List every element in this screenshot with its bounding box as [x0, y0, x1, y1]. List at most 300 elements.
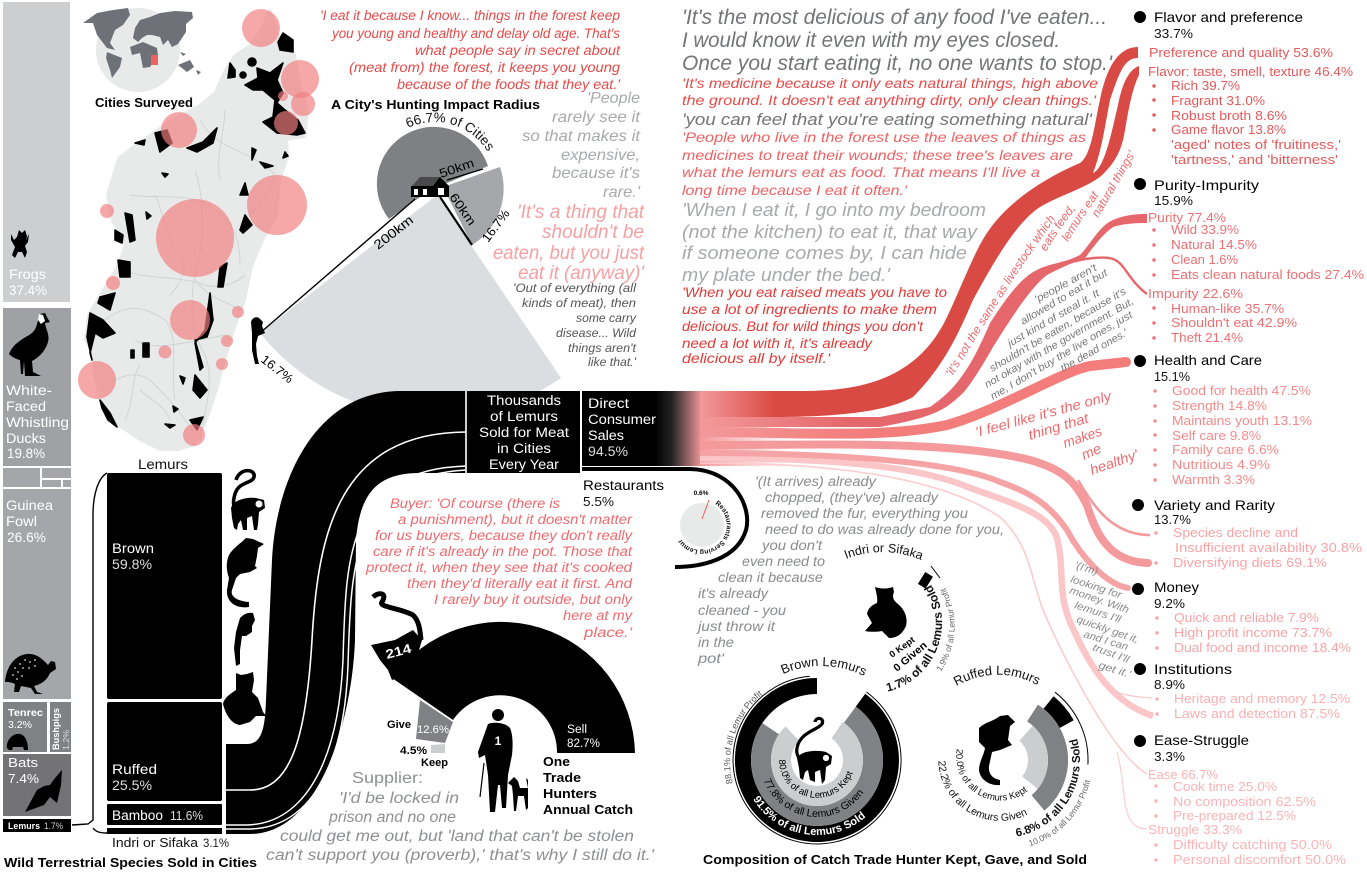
quote: it arrives already chopped: just throw it: [696, 619, 776, 634]
map landmass: [85, 10, 308, 450]
label: restaurants: Restaurants: [583, 478, 664, 493]
section: ease-struggle: [1134, 732, 1346, 867]
labels: Annual Catch: [543, 802, 633, 817]
ring: given: [751, 707, 883, 826]
flow label: not the same as livestock: 'it's not the same as livestock which: [946, 216, 1055, 375]
quote: eat it in my bedroom: my plate under the bed.': [682, 264, 892, 285]
heading: lemurs: Lemurs: [138, 457, 188, 472]
flow bands: lemur species to total sold: [226, 391, 467, 834]
ring: sold: [1044, 696, 1074, 728]
quote: raised meats: need a lot with it, it's already: [682, 336, 873, 351]
labels: [387, 719, 633, 817]
quote: most delicious: Once you start eating it, no one wants to stop.': [682, 52, 1113, 75]
quote: a thing that shouldn't be eaten: shouldn't be: [542, 222, 644, 243]
bar: indri or sifaka: Indri or Sifaka: [112, 836, 198, 850]
icon: lemur with 214: [371, 594, 422, 680]
section: purity-impurity: Purity 77.4%: [1148, 211, 1226, 225]
treemap cell: bats: [3, 754, 71, 816]
label: restaurants: 5.5%: [583, 494, 614, 509]
treemap cell: lemurs: [3, 819, 71, 832]
chart labels: 91.5% of all Lemurs Sold: [754, 796, 866, 836]
treemap cell: bushpigs: Bushpigs: [51, 708, 62, 750]
quote: people rarely see it: so that makes it: [522, 128, 641, 145]
labels: One: [543, 754, 570, 769]
sector: 50km radius: [377, 127, 488, 219]
quote: raised meats: delicious. But for wild things you don't: [682, 319, 924, 334]
section: flavor and preference: Game flavor 13.8%: [1171, 123, 1286, 137]
treemap cell: white-faced whistling ducks: [3, 308, 71, 466]
quote: it arrives already chopped: chopped, (they've) already: [765, 490, 939, 505]
treemap cell: bats: Bats: [8, 755, 39, 770]
section: health and care: 15.1%: [1154, 369, 1190, 384]
flow label: people aren't allowed: not okay with the government. But,: [983, 295, 1136, 391]
icon: brown lemur: [227, 538, 264, 607]
bar: bamboo lemurs: [107, 804, 222, 825]
quote: leaves as medicines: what the lemurs eat as food. That means I'll live a: [682, 164, 1040, 180]
section: institutions: Institutions: [1154, 661, 1232, 677]
quote: buyer: I rarely buy it outside, but only: [434, 592, 633, 607]
treemap cell: guinea fowl: Fowl: [6, 514, 37, 529]
section: purity-impurity: Human-like 35.7%: [1171, 302, 1284, 316]
flow: flavor and preference: [700, 47, 1139, 417]
thin profit arc: [931, 566, 940, 578]
flow label: I'm looking for money: and I can: [1082, 628, 1130, 653]
quote: a thing that shouldn't be eaten: eaten, but you just: [493, 243, 645, 264]
quote: out of everything: kinds of meat), then: [522, 298, 636, 310]
box: direct consumer sales: Direct: [588, 396, 629, 411]
quote: it arrives already chopped: you don't: [761, 538, 823, 553]
chart labels: 20.0% of all Lemurs Kept: [956, 749, 1028, 801]
section: health and care: Health and Care: [1154, 352, 1262, 368]
section: purity-impurity: Impurity 22.6%: [1148, 287, 1243, 301]
labels: Give: [387, 719, 411, 731]
flow: variety and rarity: [700, 444, 1152, 567]
flow label: I'm looking for money: get it.': [1097, 659, 1133, 681]
section: ease-struggle: Ease-Struggle: [1154, 732, 1249, 748]
quote: leaves as medicines: [682, 129, 1086, 198]
section: flavor and preference: Flavor: taste, smell, texture 46.4%: [1148, 65, 1353, 79]
section: money: Money: [1154, 579, 1199, 595]
ring: kept: [771, 722, 863, 806]
quote: raised meats: delicious all by itself.': [682, 351, 830, 366]
quote: supplier: [266, 770, 655, 864]
treemap cell: guinea fowl: [3, 489, 71, 699]
quote: raised meats: 'When you eat raised meats you have to: [682, 285, 948, 300]
quote: supplier: prison and no one: [328, 809, 456, 826]
icon: ring-tailed lemur: [231, 471, 265, 530]
chart: one trade hunter's annual catch: [371, 594, 635, 817]
flow label: not the same as livestock: lemurs eat: [1062, 191, 1098, 242]
quote: buyer: care if it's already in the pot. Those that: [373, 544, 633, 559]
heading: cities surveyed: Cities Surveyed: [95, 96, 193, 110]
section: health and care: Family care 6.6%: [1172, 443, 1279, 457]
panel: lemur species bars: [72, 457, 266, 850]
quote: it arrives already chopped: it's already: [698, 586, 769, 601]
section: purity-impurity: 15.9%: [1154, 193, 1193, 208]
section: purity-impurity: Wild 33.9%: [1171, 223, 1239, 237]
section: institutions: [1134, 661, 1350, 721]
section: variety and rarity: Diversifying diets 69.1%: [1173, 556, 1327, 570]
flow: institutions: [700, 458, 1153, 716]
bar: ruffed lemurs: 25.5%: [112, 777, 152, 793]
panel: restaurants share: [582, 467, 750, 569]
quote: it arrives already chopped: pot': [697, 651, 724, 666]
section: ease-struggle: Personal discomfort 50.0%: [1173, 853, 1346, 867]
section: money: High profit income 73.7%: [1174, 626, 1332, 640]
restaurant flow line: [582, 469, 747, 567]
flow: money: [700, 453, 1131, 591]
section: flavor and preference: 'tartness,' and 'bitterness': [1171, 153, 1338, 167]
icon: ring-tailed lemur: [797, 718, 832, 784]
flow label: I'm looking for money: looking for: [1069, 573, 1124, 601]
quote: buyer: for us buyers, because they don't really: [375, 528, 633, 543]
quote: out of everything: [513, 283, 637, 369]
treemap cell: bushpigs: [50, 702, 71, 752]
chart: brown lemur composition: [724, 657, 902, 844]
quote: it's medicine: [682, 75, 1098, 108]
quote: forest keeps you young: 'I eat it because I know... things in the forest keep: [320, 8, 620, 23]
treemap cell: guinea fowl: 26.6%: [7, 530, 46, 545]
section: health and care: Nutritious 4.9%: [1172, 458, 1270, 472]
segment: sold: [918, 572, 933, 589]
section: ease-struggle: Difficulty catching 50.0%: [1173, 838, 1332, 852]
section: purity-impurity: Shouldn't eat 42.9%: [1171, 316, 1297, 330]
section: flavor and preference: 'aged' notes of 'fruitiness,': [1171, 138, 1341, 152]
section: purity-impurity: Theft 21.4%: [1171, 331, 1243, 345]
section: health and care: [1134, 352, 1312, 487]
quote: it arrives already chopped: cleaned - you: [698, 603, 787, 618]
treemap cell: frogs: 37.4%: [9, 283, 47, 298]
flow label: people aren't allowed: allowed to eat it but: [1018, 266, 1111, 328]
quote: out of everything: disease... Wild: [556, 328, 637, 340]
quote: it arrives already chopped: [696, 474, 1004, 666]
quote: buyer: [365, 496, 633, 640]
heading: wild terrestrial species: Wild Terrestrial Species Sold in Cities: [4, 855, 257, 870]
labels: Trade: [543, 770, 581, 785]
box: direct consumer sales: Sales: [588, 428, 624, 443]
section: ease-struggle: Pre-prepared 12.5%: [1173, 809, 1296, 823]
treemap cell: white-faced whistling ducks: Whistling: [6, 415, 69, 430]
quote: it arrives already chopped: need to do was already done for you,: [765, 522, 1004, 537]
quote: people rarely see it: 'People: [587, 90, 640, 107]
chart labels: [938, 739, 1090, 846]
bar: bamboo lemurs: Bamboo: [112, 808, 163, 823]
labels: Hunters: [543, 786, 597, 801]
quote: eat it in my bedroom: (not the kitchen) to eat it, that way: [682, 221, 979, 242]
section: ease-struggle: No composition 62.5%: [1173, 795, 1316, 809]
quote: people rarely see it: [522, 90, 641, 201]
flow label: not the same as livestock: natural things': [1093, 150, 1134, 218]
flow label: only thing that makes me healthy: [974, 387, 1141, 478]
quote: people rarely see it: expensive,: [561, 147, 640, 164]
treemap cell: lemurs: Lemurs: [8, 821, 40, 832]
section: purity-impurity: Clean 1.6%: [1171, 253, 1238, 267]
section: flavor and preference: Fragrant 31.0%: [1171, 94, 1265, 108]
icon: bamboo lemur: [234, 613, 255, 666]
gauge: restaurants serving lemur: 0.6%: [694, 490, 709, 497]
flow label: I'm looking for money: trust I'll: [1091, 642, 1131, 666]
quote: forest keeps you young: what people say in secret about: [415, 43, 621, 58]
quote: supplier: Supplier:: [352, 770, 423, 787]
bar: indri or sifaka: 3.1%: [203, 836, 229, 850]
quote: out of everything: 'Out of everything (all: [513, 283, 636, 295]
quote: supplier: 'I'd be locked in: [339, 790, 459, 807]
quote: supplier: can't support you (proverb),' that's why I still do it.': [266, 847, 655, 864]
bar: ruffed lemurs: [107, 702, 222, 801]
radius lines and labels: [258, 112, 513, 386]
chart: a city's hunting impact radius: [251, 97, 561, 402]
chart labels: [724, 690, 866, 836]
section: flavor and preference: [1134, 9, 1353, 167]
flow label: only thing that makes me healthy: me: [1079, 440, 1104, 463]
icon: indri silhouette: [865, 587, 907, 638]
treemap cell: white-faced whistling ducks: 19.8%: [7, 446, 45, 461]
treemap cell: bats: 7.4%: [8, 771, 39, 786]
quote: leaves as medicines: long time because I eat it often.': [682, 182, 908, 198]
labels: Keep: [421, 757, 448, 769]
radius lines and labels: 60km: [447, 191, 479, 228]
flow label: not the same as livestock: eats feed,: [1042, 206, 1076, 251]
quote: forest keeps you young: (meat from) the forest, it keeps you young: [349, 60, 621, 75]
flow label: only thing that makes me healthy: healthy': [1088, 446, 1141, 478]
heading: indri or sifaka: Indri or Sifaka: [844, 544, 922, 560]
box: thousands of lemurs sold: [467, 391, 580, 473]
sector: 60km radius: [443, 167, 504, 245]
section: health and care: Warmth 3.3%: [1172, 473, 1255, 487]
quote: raised meats: [682, 285, 948, 366]
section: health and care: Strength 14.8%: [1172, 399, 1267, 413]
section: variety and rarity: 13.7%: [1154, 512, 1191, 527]
section: purity-impurity: Natural 14.5%: [1171, 238, 1257, 252]
box: thousands of lemurs sold: Thousands: [487, 393, 561, 408]
flow label: I'm looking for money: quickly get it,: [1075, 613, 1140, 646]
quote: people rarely see it: rare.': [603, 184, 641, 201]
chart labels: 0 Kept: [887, 634, 917, 660]
labels: 12.6%: [417, 724, 449, 736]
chart labels: 0 Given: [891, 639, 930, 674]
section: ease-struggle: Ease 66.7%: [1148, 768, 1218, 782]
section: health and care: Maintains youth 13.1%: [1172, 414, 1312, 428]
flow label: I'm looking for money: money. With: [1068, 584, 1131, 616]
section: ease-struggle: Struggle 33.3%: [1148, 823, 1242, 837]
icon: ruffed lemur: [979, 715, 1015, 785]
section: institutions: Laws and detection 87.5%: [1174, 707, 1340, 721]
segment: keep: [431, 744, 445, 753]
icon: house: [411, 177, 449, 197]
quote: out of everything: like that.': [588, 357, 637, 369]
quote: people rarely see it: rarely see it: [552, 109, 641, 126]
labels: 4.5%: [400, 745, 427, 757]
section: ease-struggle: Cook time 25.0%: [1173, 780, 1277, 794]
quote: most delicious: [682, 6, 1113, 75]
sankey: reasons for consuming lemur: [700, 47, 1153, 829]
quote: most delicious: 'It's the most delicious of any food I've eaten...: [682, 6, 1107, 29]
section: variety and rarity: [1132, 497, 1362, 570]
quote: eat it in my bedroom: 'When I eat it, I go into my bedroom: [682, 199, 986, 220]
chart labels: 1.7% of all Lemurs Sold: [886, 585, 942, 692]
thin profit arc: [733, 676, 901, 844]
chart labels: 80.0% of all Lemurs Kept: [778, 760, 853, 798]
section: variety and rarity: Species decline and: [1173, 526, 1298, 540]
icon: lemur with 214: 214: [384, 640, 414, 662]
labels: Sell: [567, 724, 587, 736]
chart labels: 22.2% of all Lemurs Given: [938, 761, 1028, 821]
section: purity-impurity: Eats clean natural foods 27.4%: [1171, 268, 1364, 282]
quote: it's medicine: 'It's medicine because it only eats natural things, high above: [682, 75, 1098, 91]
quote: it arrives already chopped: in the: [698, 635, 734, 650]
sector: 200km radius: [260, 195, 561, 417]
icon: globe locator: [83, 8, 201, 92]
section: money: Quick and reliable 7.9%: [1174, 611, 1319, 625]
panel: wild terrestrial species treemap: [3, 2, 71, 832]
quote: buyer: here at my: [563, 608, 633, 623]
radius lines and labels: 16.7%: [258, 352, 296, 386]
quote: eating something natural: 'you can feel that you're eating something natural': [682, 111, 1093, 129]
section: ease-struggle: 3.3%: [1154, 749, 1185, 764]
surveyed city circles: [78, 9, 319, 446]
icon: indri lemur: [223, 672, 266, 725]
quote: out of everything: things aren't: [568, 343, 637, 355]
treemap cell: lemurs: 1.7%: [44, 821, 63, 831]
radius lines and labels: 50km: [437, 156, 476, 181]
bar: indri or sifaka: [107, 828, 229, 850]
section: variety and rarity: Variety and Rarity: [1154, 497, 1275, 513]
section: institutions: 8.9%: [1154, 677, 1185, 692]
flow label: people aren't allowed: just kind of steal it. It: [1004, 287, 1103, 351]
quote: forest keeps you young: [320, 8, 621, 92]
box: thousands of lemurs sold: in Cities: [497, 441, 551, 456]
flow label: I'm looking for money: '(I'm): [1073, 559, 1100, 578]
quote: supplier: could get me out, but 'land that can't be stolen: [280, 828, 634, 845]
flow: ease-struggle: [700, 463, 1147, 829]
treemap cell: tenrec: [3, 702, 47, 752]
heading: composition of catch: Composition of Catch Trade Hunter Kept, Gave, and Sold: [703, 852, 1087, 867]
segment: sell: [392, 622, 635, 753]
quote: forest keeps you young: because of the foods that they eat.': [397, 77, 620, 92]
treemap cell: bushpigs: 1.2%: [61, 730, 71, 750]
ring: given: [1027, 705, 1068, 811]
section: money: Dual food and income 18.4%: [1174, 641, 1351, 655]
chart labels: 6.8% of all Lemurs Sold: [1016, 739, 1080, 836]
flow label: only thing that makes me healthy: makes: [1061, 423, 1104, 451]
section: flavor and preference: Rich 39.7%: [1171, 79, 1240, 93]
chart: ruffed lemur composition: [938, 666, 1090, 846]
heading: ruffed lemurs: Ruffed Lemurs: [953, 666, 1040, 686]
flow label: not the same as livestock: [946, 150, 1134, 375]
quote: a thing that shouldn't be eaten: eat it (anyway)': [518, 263, 645, 284]
quote: buyer: place.': [583, 625, 633, 640]
box: thousands of lemurs sold: Every Year: [489, 457, 560, 472]
section: flavor and preference: Robust broth 8.6%: [1171, 109, 1287, 123]
treemap cell: white-faced whistling ducks: Faced: [6, 399, 46, 414]
treemap cell: guinea fowl: Guinea: [6, 498, 54, 513]
quote: it arrives already chopped: removed the fur, everything you: [761, 506, 969, 521]
section: variety and rarity: Insufficient availability 30.8%: [1175, 541, 1362, 555]
flow label: people aren't allowed: [983, 261, 1136, 403]
treemap cell: white-faced whistling ducks: White-: [6, 383, 52, 398]
icon: hunter with dog: [478, 709, 528, 812]
quote: eat it in my bedroom: if someone comes by, I can hide: [682, 242, 967, 263]
icon: small lemur: [251, 317, 265, 364]
flow label: I'm looking for money: [1068, 559, 1140, 681]
quote: forest keeps you young: you young and healthy and delay old age. That's: [331, 26, 620, 41]
flow label: people aren't allowed: shouldn't be eaten, because it's: [987, 285, 1129, 375]
treemap cell: small unlabelled species: [3, 468, 71, 487]
quote: it arrives already chopped: '(It arrives) already: [755, 474, 877, 489]
heading: brown lemurs: Brown Lemurs: [780, 657, 866, 676]
section: flavor and preference: Preference and quality 53.6%: [1149, 46, 1333, 60]
quote: eat it in my bedroom: [682, 199, 986, 285]
chart: indri or sifaka composition: [844, 544, 955, 692]
chart labels: 10.0% of all Lemur Profit: [1029, 780, 1090, 846]
quote: buyer: protect it, when they see that it's cooked: [365, 560, 633, 575]
quote: it arrives already chopped: clean it because: [718, 570, 823, 585]
icon: hunter with dog: 1: [495, 734, 502, 748]
bar: brown lemurs: [107, 473, 222, 699]
quote: it's medicine: the ground. It doesn't eat anything dirty, only clean things.': [682, 92, 1098, 108]
flow label: I'm looking for money: lemurs I'll: [1073, 599, 1123, 626]
treemap cell: tenrec: 3.2%: [8, 720, 32, 731]
heading: hunting impact radius: A City's Hunting Impact Radius: [331, 97, 540, 112]
bracket linking lemurs cell to bars: [72, 473, 107, 833]
flow: health and care: [700, 357, 1131, 434]
gauge: restaurants serving lemur: Restaurants Serving Lemur: [678, 500, 730, 554]
chart labels: 88.1% of all Lemur Profit: [724, 690, 763, 784]
bar: bamboo lemurs: 11.6%: [170, 808, 203, 823]
ring: sold: [735, 678, 899, 842]
box: direct consumer sales: Consumer: [588, 412, 657, 427]
ring: kept: [1019, 726, 1048, 789]
quote: buyer: then they'd literally eat it first. And: [407, 576, 633, 591]
quote: it arrives already chopped: even need to: [742, 554, 826, 569]
box: thousands of lemurs sold: of Lemurs: [490, 409, 558, 424]
quote: buyer: Buyer: 'Of course (there is: [390, 496, 560, 511]
box: thousands of lemurs sold: Sold for Meat: [479, 425, 569, 440]
treemap cell: tenrec: Tenrec: [8, 707, 43, 719]
treemap cell: frogs: [3, 2, 70, 302]
bar: ruffed lemurs: Ruffed: [112, 761, 157, 777]
quote: most delicious: I would know it even with my eyes closed.: [682, 29, 1060, 52]
quote: buyer: a punishment), but it doesn't matter: [398, 512, 633, 527]
section: institutions: Heritage and memory 12.5%: [1174, 692, 1350, 706]
treemap cell: white-faced whistling ducks: Ducks: [6, 431, 46, 446]
labels: 82.7%: [567, 738, 600, 750]
quote: a thing that shouldn't be eaten: [493, 202, 645, 284]
quote: leaves as medicines: 'People who live in the forest use the leaves of things as: [682, 129, 1086, 145]
section: money: [1132, 579, 1351, 655]
radius lines and labels: 16.7%: [479, 207, 513, 245]
flow label: people aren't allowed: me, I don't buy the live ones, just: [988, 308, 1136, 403]
box: direct consumer sales: 94.5%: [588, 444, 628, 459]
box: direct consumer sales: [582, 391, 790, 466]
thin profit arc: [1055, 692, 1088, 764]
section: health and care: Self care 9.8%: [1172, 429, 1261, 443]
section: purity-impurity: Purity-Impurity: [1154, 177, 1259, 193]
segment: give: [416, 700, 453, 743]
bar: brown lemurs: 59.8%: [112, 556, 152, 572]
section: flavor and preference: 33.7%: [1154, 26, 1193, 41]
flow label: people aren't allowed: the dead ones.': [1059, 327, 1131, 375]
flow label: only thing that makes me healthy: thing that: [1026, 409, 1091, 443]
section: purity-impurity: [1134, 177, 1364, 345]
flow: purity-impurity: [700, 214, 1147, 427]
section: flavor and preference: Flavor and preference: [1154, 9, 1303, 25]
quote: a thing that shouldn't be eaten: 'It's a thing that: [517, 202, 645, 223]
quote: out of everything: some carry: [576, 313, 637, 325]
map: Madagascar with hunting forests and surveyed cities: [78, 9, 319, 450]
chart labels: 1.9% of all Lemur Profit: [936, 588, 955, 672]
bar: brown lemurs: Brown: [112, 540, 154, 556]
